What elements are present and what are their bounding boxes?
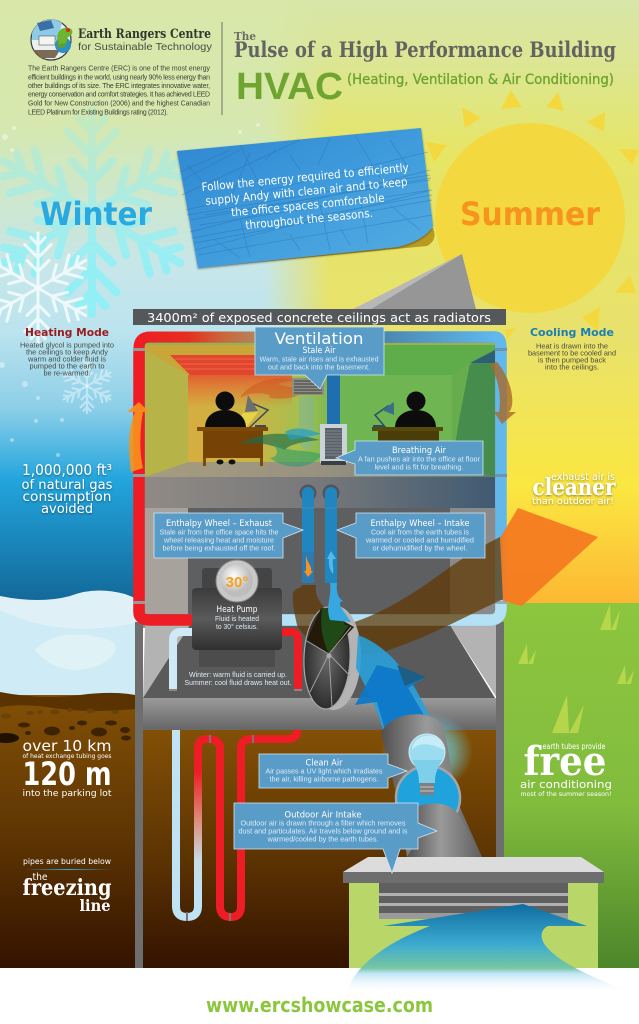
header logo xyxy=(31,20,213,60)
cooling mode text: is then pumped back xyxy=(538,358,607,364)
exhaust air stat: cleaner xyxy=(532,474,616,501)
heating mode text: Heated glycol is pumped into xyxy=(20,342,114,350)
callout: clean air: the air, killing airborne pathogens. xyxy=(270,774,378,784)
snow dots xyxy=(0,123,260,457)
callout: clean air xyxy=(259,754,407,788)
about paragraph: The Earth Rangers Centre (ERC) is one of the most energy xyxy=(28,66,211,72)
basement earth xyxy=(143,730,497,968)
callout: outdoor air intake: warmed/cooled by the earth tubes. xyxy=(267,834,378,844)
intake stream into wheel xyxy=(328,583,351,622)
natural gas stat: avoided xyxy=(41,502,93,517)
heating mode text: be re-warmed. xyxy=(44,370,91,378)
white snowflake xyxy=(0,233,92,343)
room shell xyxy=(143,338,503,628)
winter ground xyxy=(0,692,143,968)
free air conditioning stat: air conditioning xyxy=(520,778,612,791)
wheel segment xyxy=(307,608,354,654)
callout: ventilation: Warm, stale air rises and is exhausted xyxy=(260,354,378,364)
callout: outdoor air intake xyxy=(234,803,437,873)
free air conditioning stat: earth tubes provide xyxy=(542,742,606,751)
about paragraph xyxy=(28,66,211,116)
title: HVAC: HVAC xyxy=(236,66,343,108)
heating loop pipe: red xyxy=(133,337,256,620)
callout: ventilation: out and back into the basement. xyxy=(268,362,370,372)
heating mode text xyxy=(20,326,114,378)
right lamp xyxy=(373,402,394,428)
temperature dial: 30° xyxy=(226,574,248,591)
heating mode text: Heating Mode xyxy=(25,326,109,339)
large snowflake xyxy=(0,110,193,314)
exhaust air stat xyxy=(532,472,616,507)
callout: breathing air: Breathing Air xyxy=(392,446,446,456)
vertical air shafts xyxy=(300,484,340,583)
callout: breathing air: level and is fit for breathing. xyxy=(374,462,464,472)
callout: enthalpy wheel exhaust: Enthalpy Wheel – Exhaust xyxy=(166,519,272,529)
title: HVAC expansion: (Heating, Ventilation & Air Conditioning) xyxy=(347,72,614,88)
about paragraph: LEED Platinum for Existing Buildings rating (2012). xyxy=(28,110,168,116)
callout: breathing air: A fan pushes air into the office at floor xyxy=(358,454,480,464)
fluid note: Winter: warm fluid is carried up. xyxy=(189,670,287,679)
freezing line stat xyxy=(22,857,113,915)
fluid note: Summer: cool fluid draws heat out. xyxy=(184,678,292,687)
about paragraph: efficient buildings in the world, using nearly 90% less energy than xyxy=(28,74,210,82)
enthalpy wheel xyxy=(302,605,363,711)
right person at desk xyxy=(372,392,443,463)
callout: enthalpy wheel intake xyxy=(337,513,485,558)
callout: ventilation: Stale Air xyxy=(302,346,336,356)
background: winter sky xyxy=(0,0,330,600)
about paragraph: other buildings of its size. The ERC integrates innovative water, xyxy=(28,83,210,90)
mechanical room xyxy=(143,508,497,730)
note text: the office spaces comfortable xyxy=(230,191,385,219)
tubing stat: into the parking lot xyxy=(22,789,112,799)
roof xyxy=(322,254,480,325)
callout: clean air: Air passes a UV light which irradiates xyxy=(266,766,383,776)
cooling mode text: into the ceilings. xyxy=(545,364,599,372)
exhaust arrow outside building xyxy=(500,508,598,606)
season label: winter: Winter xyxy=(40,195,152,233)
tubing stat xyxy=(22,737,112,799)
callout: enthalpy wheel exhaust: before being exhausted off the roof. xyxy=(162,544,276,552)
note text: supply Andy with clean air and to keep xyxy=(205,174,408,208)
louvres xyxy=(379,883,568,919)
building upper room xyxy=(143,338,505,628)
background: summer sky xyxy=(0,0,639,610)
intake air stream xyxy=(347,904,633,993)
callout: ventilation: Ventilation xyxy=(274,329,364,348)
callout: enthalpy wheel exhaust: Stale air from the office space hits the xyxy=(160,528,278,536)
supply duct and floor fan xyxy=(320,372,347,465)
tubing stat: of heat exchange tubing goes xyxy=(22,753,112,760)
stale air tube xyxy=(299,397,314,450)
callout: enthalpy wheel exhaust: wheel releasing heat and moisture xyxy=(163,536,274,544)
uv chamber ring xyxy=(396,766,460,830)
callout: breathing air xyxy=(336,441,483,475)
exhaust air arrow xyxy=(293,508,598,655)
air intake pipe xyxy=(381,712,482,857)
fresh air swirl xyxy=(240,434,320,450)
season label: summer: Summer xyxy=(460,195,600,233)
heating mode text: warm and colder fluid is xyxy=(27,356,107,364)
title xyxy=(234,29,616,108)
heat pump xyxy=(169,560,302,691)
intake air arrow xyxy=(355,635,432,735)
free air conditioning stat: most of the summer season! xyxy=(520,790,612,798)
logo name: Earth Rangers Centre xyxy=(78,27,211,42)
callout: enthalpy wheel intake: warmed or cooled and humidified xyxy=(365,536,474,544)
tubing stat: 120 m xyxy=(22,755,112,793)
floor xyxy=(145,462,495,477)
free air conditioning stat: free xyxy=(524,738,606,785)
intake flow arrow xyxy=(327,551,336,574)
callout: enthalpy wheel intake: Cool air from the earth tubes is xyxy=(371,528,469,536)
freezing line stat: pipes are buried below xyxy=(23,857,111,866)
summer lawn xyxy=(503,603,639,968)
ceiling xyxy=(145,343,505,375)
earth tube loop xyxy=(176,730,298,921)
callout: clean air: Clean Air xyxy=(306,758,343,768)
rocks xyxy=(0,708,131,743)
exhaust air stat: than outdoor air! xyxy=(532,497,614,507)
right wall xyxy=(452,350,495,477)
about paragraph: Gold for New Construction (2006) and the highest Canadian xyxy=(28,100,210,108)
cooling loop pipe: blue xyxy=(280,337,507,620)
exhaust arrow inside building xyxy=(292,536,503,652)
concrete ceiling banner: 3400m² of exposed concrete ceilings act as radiators xyxy=(147,311,491,325)
uv glow xyxy=(381,712,473,792)
cooling mode text: Cooling Mode xyxy=(530,326,614,339)
warm air arrow xyxy=(127,402,149,472)
heat pump label: to 30° celsius. xyxy=(216,622,258,631)
note text: Follow the energy required to efficiently xyxy=(201,160,409,194)
natural gas stat: 1,000,000 ft³ xyxy=(22,461,112,479)
cooling mode text: Heat is drawn into the xyxy=(536,344,608,350)
callout: enthalpy wheel intake: or dehumidified by the wheel. xyxy=(372,544,468,552)
exhaust flow arrow xyxy=(304,555,313,577)
natural gas stat: consumption xyxy=(22,490,112,505)
callout: outdoor air intake: Outdoor Air Intake xyxy=(284,810,362,820)
callout: enthalpy wheel intake: Enthalpy Wheel – Intake xyxy=(370,519,470,529)
radiant ceiling glow xyxy=(170,355,292,375)
building side walls xyxy=(135,622,504,968)
lamp xyxy=(232,395,268,428)
filter lid xyxy=(343,857,604,872)
exhaust air stat: exhaust air is xyxy=(551,472,615,483)
freezing line stat: line xyxy=(80,896,110,915)
callout: enthalpy wheel exhaust xyxy=(154,513,303,558)
cool air arrow xyxy=(490,362,516,424)
heat pump label xyxy=(215,605,259,631)
callout: outdoor air intake: dust and particulates. Air travels below ground and is xyxy=(238,826,408,836)
intake filter housing xyxy=(343,857,604,968)
grass tufts xyxy=(518,604,634,733)
left room walls xyxy=(145,350,190,477)
about paragraph: energy conservation and comfort strategies. It has achieved LEED xyxy=(28,92,210,98)
stale air swirl xyxy=(240,378,310,399)
note text: throughout the seasons. xyxy=(245,206,373,232)
callout: ventilation xyxy=(255,327,384,389)
freezing line stat: freezing xyxy=(22,875,112,901)
logo emblem xyxy=(31,20,72,60)
room back wall xyxy=(188,375,452,463)
cooling mode text: basement to be cooled and xyxy=(528,350,616,358)
mechanical floor band xyxy=(145,477,495,508)
natural gas stat: of natural gas xyxy=(22,478,113,493)
heating mode text: pumped to the earth to xyxy=(30,364,105,370)
heating mode text: the ceilings to keep Andy xyxy=(26,350,109,356)
cooling mode text xyxy=(528,326,616,372)
sun xyxy=(426,90,639,340)
exhaust grille xyxy=(292,378,324,395)
callout: outdoor air intake: Outdoor air is drawn through a filter which removes xyxy=(240,818,406,828)
heat pump label: Fluid is heated xyxy=(215,614,259,623)
winter snow bank xyxy=(0,590,140,700)
title: the: The xyxy=(234,29,256,43)
heat pump label: Heat Pump xyxy=(216,605,258,615)
freezing line stat: the xyxy=(32,872,48,883)
note text xyxy=(201,160,413,236)
website footer: www.ercshowcase.com xyxy=(206,993,433,1017)
small snowflake xyxy=(60,359,114,413)
left person at desk xyxy=(197,392,268,466)
uv light bulb xyxy=(409,734,445,795)
blueprint note xyxy=(177,128,435,268)
tubing stat: over 10 km xyxy=(22,737,112,755)
natural gas stat xyxy=(22,461,113,517)
logo subtitle: for Sustainable Technology xyxy=(78,41,213,53)
fluid note xyxy=(184,670,292,687)
